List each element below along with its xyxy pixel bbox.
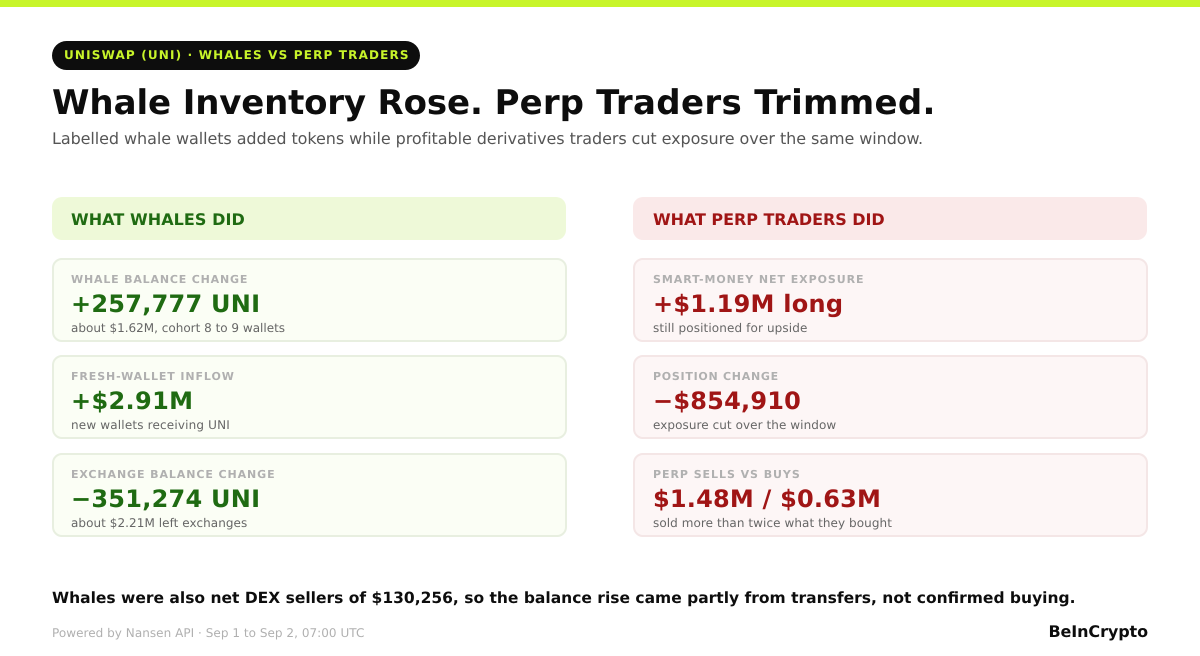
takeaway text: Whales were also net DEX sellers of $130,256, so the balance rise came partly from transfers, not confirmed buying. <box>52 589 1076 607</box>
heading: what whales did: WHAT WHALES DID <box>71 210 245 229</box>
panel: what perp traders did <box>633 197 1148 537</box>
tag pill: UNISWAP (UNI) · WHALES VS PERP TRADERS <box>64 48 410 62</box>
card: exchange balance change <box>52 453 567 537</box>
source note: Powered by Nansen API · Sep 1 to Sep 2, 07:00 UTC <box>52 626 364 640</box>
brand wordmark: BeInCrypto <box>1048 622 1148 641</box>
card: whale balance change: +257,777 UNI <box>71 290 260 318</box>
card: exchange balance change: EXCHANGE BALANCE CHANGE <box>71 468 276 481</box>
top accent bar <box>0 0 1200 7</box>
card: fresh-wallet inflow <box>52 355 567 439</box>
heading: what perp traders did: WHAT PERP TRADERS DID <box>653 210 885 229</box>
card: whale balance change: about $1.62M, cohort 8 to 9 wallets <box>71 321 285 335</box>
panel: what whales did <box>52 197 567 537</box>
card: smart-money net exposure <box>633 258 1148 342</box>
subtitle: Labelled whale wallets added tokens while profitable derivatives traders cut exposure over the same window. <box>52 129 923 148</box>
heading: what perp traders did <box>633 197 1147 240</box>
card: whale balance change <box>52 258 567 342</box>
card: perp sells vs buys: $1.48M / $0.63M <box>653 485 881 513</box>
card: perp sells vs buys: sold more than twice what they bought <box>653 516 892 530</box>
card: exchange balance change: −351,274 UNI <box>71 485 260 513</box>
card: perp sells vs buys: PERP SELLS VS BUYS <box>653 468 801 481</box>
tag pill <box>52 41 420 70</box>
card: position change <box>633 355 1148 439</box>
card: fresh-wallet inflow: new wallets receiving UNI <box>71 418 230 432</box>
card: position change: POSITION CHANGE <box>653 370 779 383</box>
card: whale balance change: WHALE BALANCE CHANGE <box>71 273 248 286</box>
title: Whale Inventory Rose. Perp Traders Trimmed. <box>52 83 936 123</box>
heading: what whales did <box>52 197 566 240</box>
card: fresh-wallet inflow: +$2.91M <box>71 387 193 415</box>
card: position change: exposure cut over the window <box>653 418 836 432</box>
card: position change: −$854,910 <box>653 387 801 415</box>
card: smart-money net exposure: still positioned for upside <box>653 321 807 335</box>
card: exchange balance change: about $2.21M left exchanges <box>71 516 247 530</box>
card: fresh-wallet inflow: FRESH-WALLET INFLOW <box>71 370 235 383</box>
card: smart-money net exposure: +$1.19M long <box>653 290 843 318</box>
card: perp sells vs buys <box>633 453 1148 537</box>
card: smart-money net exposure: SMART-MONEY NET EXPOSURE <box>653 273 864 286</box>
